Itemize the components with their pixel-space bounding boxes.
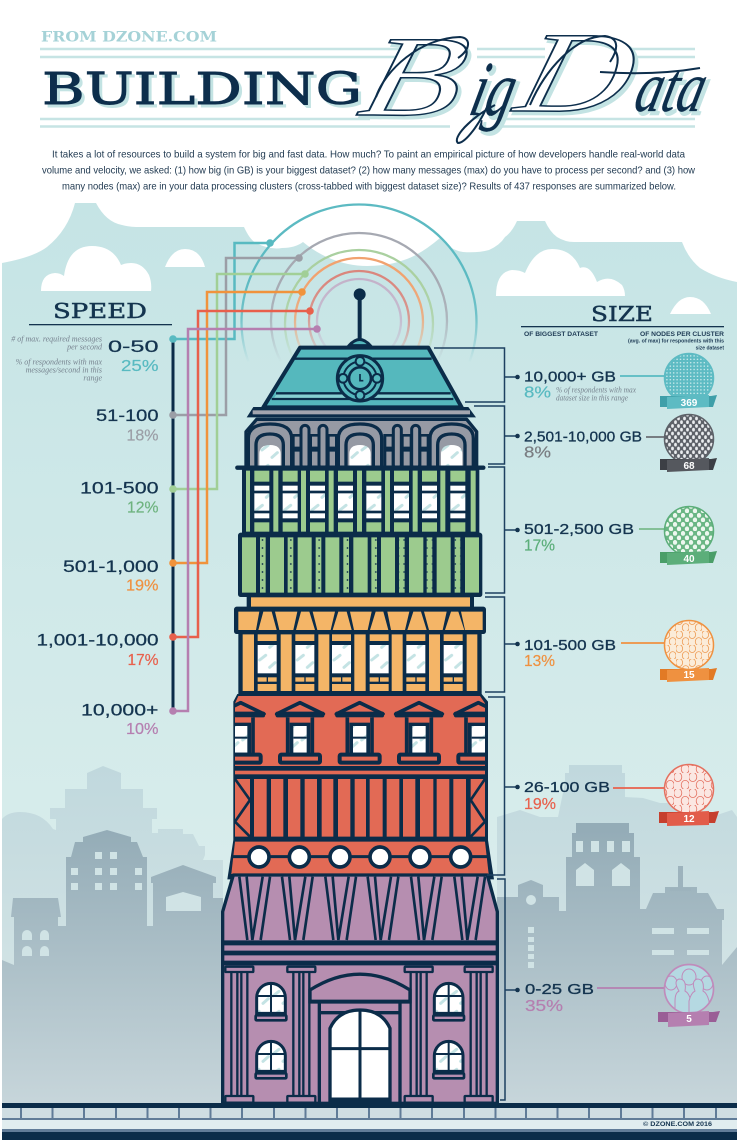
header rules (40, 49, 695, 126)
foreground skyline, dark layer with window cutouts (2, 823, 737, 1103)
speed values: 12% (127, 500, 159, 516)
intro paragraph (42, 150, 695, 192)
green lower storey (238, 533, 482, 597)
speed legend notes (11, 334, 103, 382)
speed values: 10% (126, 721, 159, 738)
cluster globe: 68 nodes (646, 414, 717, 472)
size column headers: (avg. of max) for respondents with this (628, 338, 724, 344)
speed values: 25% (121, 358, 159, 375)
cluster globe: 15 nodes (621, 620, 717, 682)
cluster globe: 369 nodes: 369 (681, 398, 698, 409)
size values (524, 370, 642, 1015)
cluster globe: 369 nodes (620, 353, 717, 409)
speed axis and connector lines (169, 239, 321, 715)
size values: 19% (524, 796, 556, 813)
size values: % of respondents with max (556, 386, 636, 394)
size values: 8% (524, 384, 551, 402)
title (42, 10, 719, 144)
size values: 501-2,500 GB (524, 522, 634, 538)
title: D (506, 13, 652, 140)
cluster globe: 40 nodes (639, 506, 717, 565)
clouds (41, 246, 711, 314)
tower (216, 288, 503, 1106)
size values: 35% (525, 998, 563, 1015)
antenna (349, 288, 370, 346)
title: B (352, 17, 483, 144)
speed heading: SPEED (53, 299, 147, 323)
size column headers: size dataset (696, 346, 724, 352)
cluster globe: 12 nodes (613, 764, 719, 826)
cluster globe: 5 nodes (597, 964, 720, 1027)
size values: 10,000+ GB (524, 370, 616, 386)
sky background with cloud-shaped top (2, 203, 737, 1105)
red storey with pediment windows, stripes and portholes (216, 694, 503, 879)
intro paragraph: It takes a lot of resources to build a system for big and fast data. How much? To paint an empirical picture of how developers handle real-world data (52, 150, 685, 160)
purple ground storey with door and windows (223, 875, 497, 1106)
size values: 13% (524, 653, 555, 670)
size values: 101-500 GB (524, 638, 616, 654)
speed values: 19% (126, 578, 159, 594)
speed legend notes: # of max. required messages (11, 334, 102, 344)
title: BUILDING (45, 67, 365, 118)
size values: 17% (524, 538, 555, 555)
street and pavement (2, 1103, 737, 1140)
speed legend notes: per second (66, 342, 103, 352)
columns (225, 967, 493, 1103)
size values: 26-100 GB (524, 780, 610, 796)
speed legend notes: % of respondents with max (16, 358, 102, 366)
cluster globe: 68 nodes: 68 (683, 461, 695, 472)
title: ata (628, 47, 716, 127)
speed values: 18% (126, 428, 159, 444)
cluster globe: 15 nodes: 15 (683, 670, 695, 681)
size values: dataset size in this range (556, 394, 628, 402)
title: D (503, 10, 649, 137)
speed legend notes: range (83, 374, 102, 382)
size values: 0-25 GB (525, 982, 594, 998)
entrance door (309, 974, 411, 1103)
cluster globe: 40 nodes: 40 (683, 554, 695, 565)
speed values: 501-1,000 (63, 557, 158, 576)
cluster globe: 5 nodes: 5 (686, 1014, 692, 1025)
orange storey (234, 593, 486, 695)
tower section brackets (434, 348, 520, 1100)
speed values: 51-100 (96, 406, 158, 425)
size column headers: OF BIGGEST DATASET (524, 331, 598, 338)
size values: 8% (524, 445, 551, 462)
speed values: 101-500 (80, 478, 158, 498)
arched windows (256, 983, 464, 1078)
roof with clock (263, 348, 462, 407)
speed values (36, 337, 159, 738)
size heading: SIZE (591, 302, 653, 326)
green upper storey (237, 468, 483, 535)
speed legend notes: messages/second in this (26, 366, 102, 374)
speed values: 0-50 (108, 337, 158, 356)
copyright: © DZONE.COM 2016 (643, 1120, 712, 1128)
title: ig (466, 49, 529, 136)
title: B (349, 14, 480, 141)
speed values: 1,001-10,000 (36, 631, 158, 650)
timber braces (239, 877, 485, 940)
size column headers: OF NODES PER CLUSTER (640, 331, 724, 338)
title: BUILDING (42, 64, 362, 115)
header eyebrow: FROM DZONE.COM (41, 30, 217, 46)
cluster globe: 12 nodes: 12 (683, 814, 695, 825)
signal arcs above the antenna (240, 203, 478, 358)
speed values: 17% (128, 652, 159, 669)
size values: 2,501-10,000 GB (524, 430, 642, 446)
grey storey with arched windows (246, 407, 477, 470)
title: ig (463, 46, 526, 133)
size column headers (524, 331, 724, 352)
speed values: 10,000+ (81, 701, 158, 720)
intro paragraph: many nodes (max) are in your data processing clusters (cross-tabbed with biggest dataset size)? Results of 437 responses are summarized below. (62, 182, 676, 192)
background skyline, light layer (2, 765, 737, 1103)
